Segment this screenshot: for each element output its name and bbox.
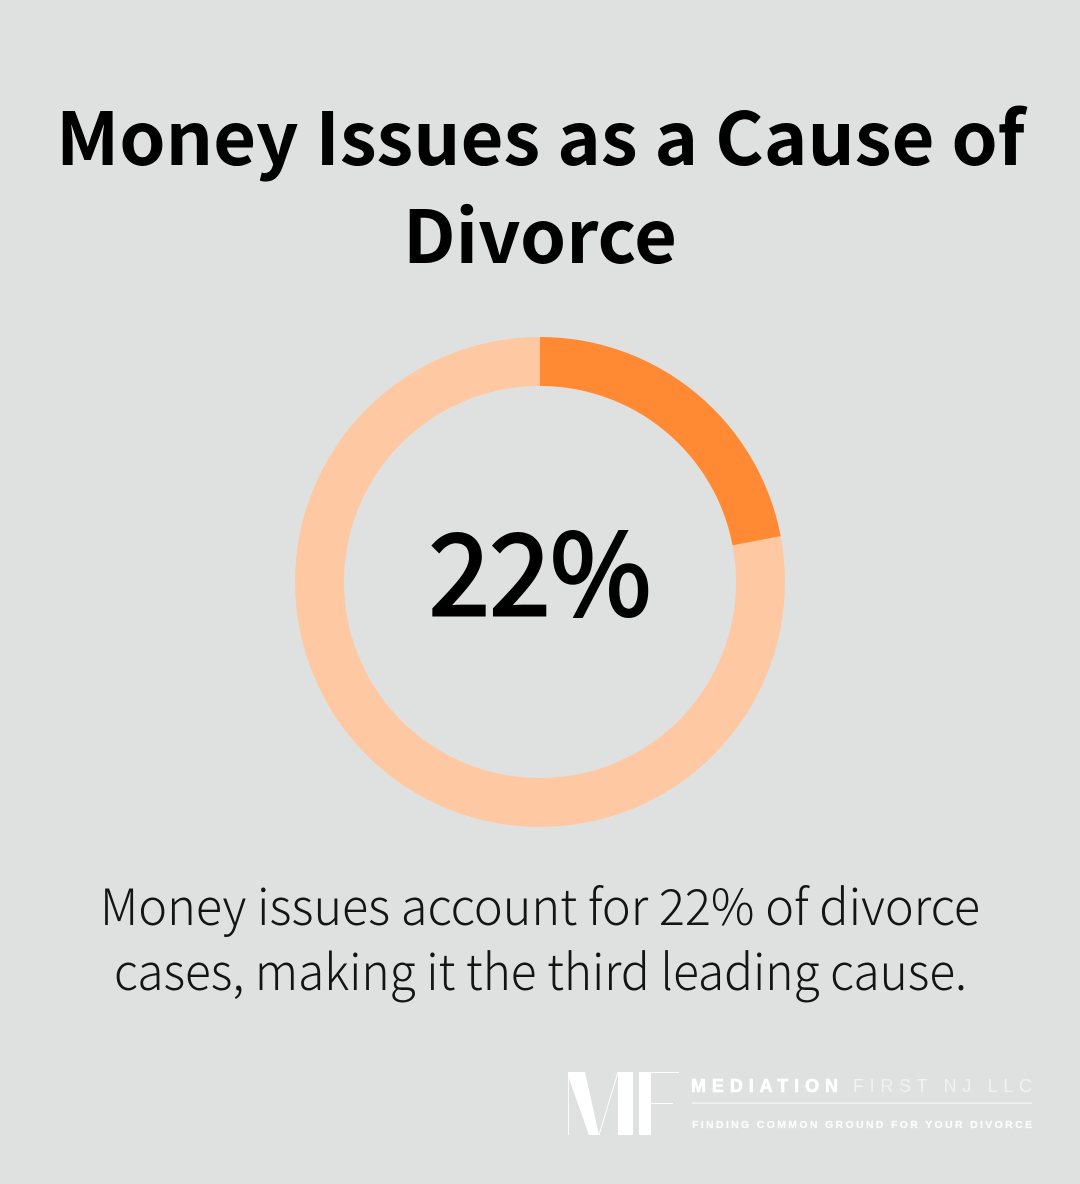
donut highlighted segment [540, 362, 757, 541]
title [56, 81, 1028, 285]
description text [100, 868, 980, 1005]
title: Money Issues as a Cause of [56, 81, 1028, 187]
logo mark: MF [568, 1072, 679, 1135]
description text: cases, making it the third leading cause. [114, 933, 967, 1005]
description text: Money issues account for 22% of divorce [100, 868, 980, 940]
logo name: MEDIATION [691, 1076, 838, 1096]
logo: Mediation First NJ LLC: FIRST NJ LLC [853, 1076, 1032, 1096]
title: Divorce [403, 179, 677, 285]
logo: Mediation First NJ LLC [568, 1072, 1032, 1135]
donut track [320, 362, 760, 802]
logo tagline: FINDING COMMON GROUND FOR YOUR DIVORCE [692, 1119, 1032, 1131]
donut chart: 22% [320, 362, 760, 802]
center value: 22% [429, 486, 651, 648]
